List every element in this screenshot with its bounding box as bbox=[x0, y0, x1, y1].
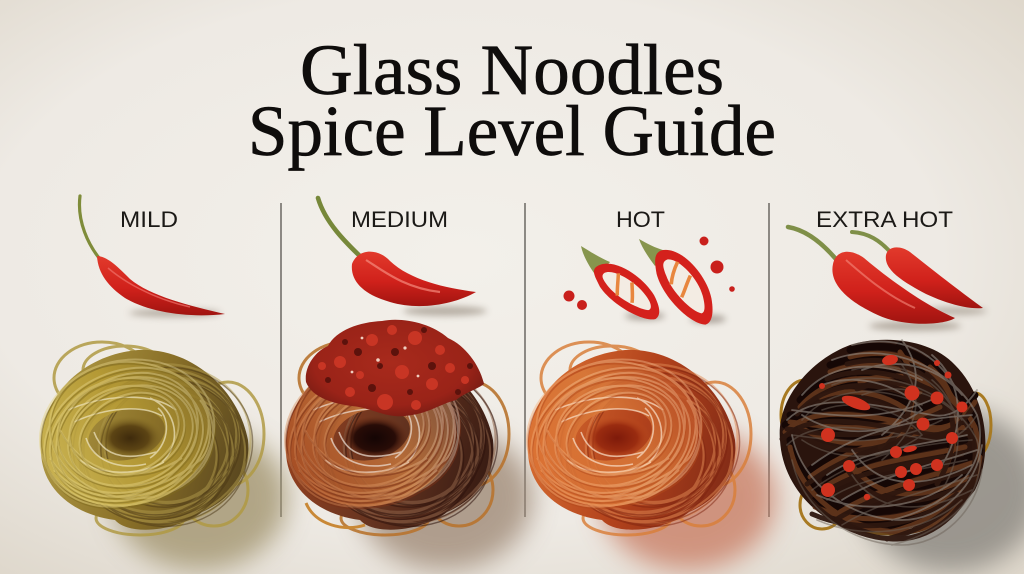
label: hot: HOT bbox=[616, 207, 665, 232]
panel: extra hot bbox=[780, 207, 1024, 572]
noodle nest: hot bbox=[509, 341, 776, 570]
chili flakes bbox=[819, 354, 968, 500]
chili sauce topping bbox=[306, 320, 484, 416]
panel: mild bbox=[22, 196, 288, 570]
title bbox=[248, 30, 776, 171]
panel: medium bbox=[267, 198, 533, 570]
title: Spice Level Guide bbox=[248, 91, 776, 171]
panel: hot bbox=[509, 207, 776, 570]
label: medium: MEDIUM bbox=[351, 207, 448, 232]
icon: medium chili bbox=[318, 198, 487, 316]
label: extra hot: EXTRA HOT bbox=[816, 207, 953, 232]
title: Glass Noodles bbox=[300, 30, 724, 110]
column dividers bbox=[281, 203, 769, 517]
icon: mild chili bbox=[79, 196, 225, 317]
noodle nest: medium bbox=[267, 320, 533, 570]
noodle nest: extra hot bbox=[780, 340, 1024, 572]
icon: two red chilies bbox=[788, 227, 987, 331]
icon: sliced chilies and seeds bbox=[564, 236, 735, 331]
label: mild: MILD bbox=[120, 207, 178, 232]
noodle nest: mild bbox=[22, 341, 288, 570]
